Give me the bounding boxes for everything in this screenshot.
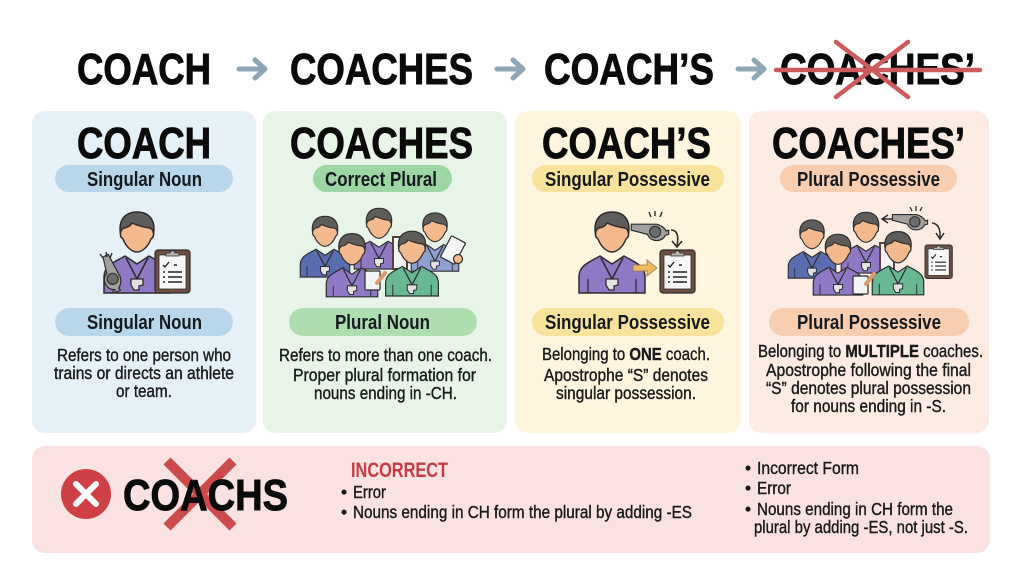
text: rule list bbox=[745, 458, 968, 537]
description bbox=[54, 345, 234, 401]
arrow 2 bbox=[497, 60, 523, 78]
panel: incorrect form COACHS bbox=[32, 446, 990, 553]
icon: group of coaches with whistle and clipboard bbox=[788, 206, 952, 295]
top progression row bbox=[77, 42, 980, 97]
tag: bottom bbox=[532, 308, 724, 336]
tag: bottom bbox=[769, 308, 969, 336]
heading: COACHES’ bbox=[772, 119, 965, 168]
text: rule list: Error bbox=[757, 478, 791, 498]
description: “S” denotes plural possession bbox=[766, 378, 971, 398]
text: incorrect list: • bbox=[341, 482, 347, 502]
crossed out word COACHS bbox=[123, 461, 288, 527]
tag: top: Correct Plural bbox=[325, 169, 437, 191]
description: singular possession. bbox=[556, 383, 696, 403]
panel: COACH singular noun bbox=[32, 111, 256, 433]
tag: top: Singular Possessive bbox=[545, 169, 710, 191]
description: Refers to more than one coach. bbox=[279, 345, 492, 365]
tag: top: Plural Possessive bbox=[797, 169, 940, 191]
tag: bottom: Singular Possessive bbox=[545, 312, 710, 334]
description: Proper plural formation for bbox=[293, 365, 476, 385]
crossed out word COACHS: COACHS bbox=[123, 471, 288, 520]
description: Apostrophe “S” denotes bbox=[544, 365, 708, 385]
description: for nouns ending in -S. bbox=[791, 396, 946, 416]
tag: bottom bbox=[289, 308, 477, 336]
heading: COACHES bbox=[290, 119, 473, 168]
text: incorrect list: INCORRECT bbox=[351, 459, 448, 482]
tag: bottom: Plural Possessive bbox=[797, 312, 941, 334]
text: rule list: plural by adding -ES, not just -S. bbox=[754, 517, 968, 537]
panel: COACH'S singular possessive bbox=[515, 111, 741, 433]
text: incorrect list: Error bbox=[353, 482, 386, 502]
arrow 1 bbox=[239, 60, 265, 78]
description: nouns ending in -CH. bbox=[314, 383, 457, 403]
heading: COACH’S bbox=[542, 119, 711, 168]
panel: COACHES correct plural bbox=[263, 111, 507, 433]
text: incorrect list: Nouns ending in CH form the plural by adding -ES bbox=[353, 502, 692, 522]
text: rule list: • bbox=[745, 499, 751, 519]
heading: COACH bbox=[77, 119, 211, 168]
tag: bottom bbox=[55, 308, 233, 336]
text: incorrect list: • bbox=[341, 502, 347, 522]
description: Refers to one person who bbox=[57, 345, 231, 365]
tag: bottom: Singular Noun bbox=[87, 312, 202, 334]
text: incorrect list bbox=[341, 459, 692, 522]
word: COACHES: COACHES bbox=[290, 45, 473, 94]
description bbox=[279, 345, 492, 403]
text: rule list: Nouns ending in CH form the bbox=[757, 499, 953, 519]
icon: coach with whistle and clipboard bbox=[94, 212, 190, 295]
word: COACHES' crossed out: COACHES’ bbox=[780, 45, 975, 94]
description: or team. bbox=[116, 381, 172, 401]
text: rule list: • bbox=[745, 478, 751, 498]
icon: group of coaches bbox=[300, 208, 466, 297]
tag: top: Singular Noun bbox=[87, 169, 202, 191]
description bbox=[758, 341, 983, 416]
tag: top bbox=[55, 165, 233, 192]
panel: COACHES' plural possessive bbox=[749, 111, 989, 433]
word: COACH'S: COACH’S bbox=[544, 45, 714, 94]
text: rule list: • bbox=[745, 458, 751, 478]
tag: bottom: Plural Noun bbox=[335, 312, 430, 334]
description: Belonging to MULTIPLE coaches. bbox=[758, 341, 983, 361]
arrow 3 bbox=[738, 60, 764, 78]
word: COACH: COACH bbox=[77, 45, 211, 94]
description bbox=[542, 344, 710, 403]
description: Belonging to ONE coach. bbox=[542, 344, 710, 364]
icon: red circle with X bbox=[61, 469, 111, 519]
text: rule list: Incorrect Form bbox=[757, 458, 859, 478]
icon: coach, whistle and clipboard bbox=[579, 211, 695, 293]
description: Apostrophe following the final bbox=[766, 360, 971, 380]
description: trains or directs an athlete bbox=[54, 363, 234, 383]
